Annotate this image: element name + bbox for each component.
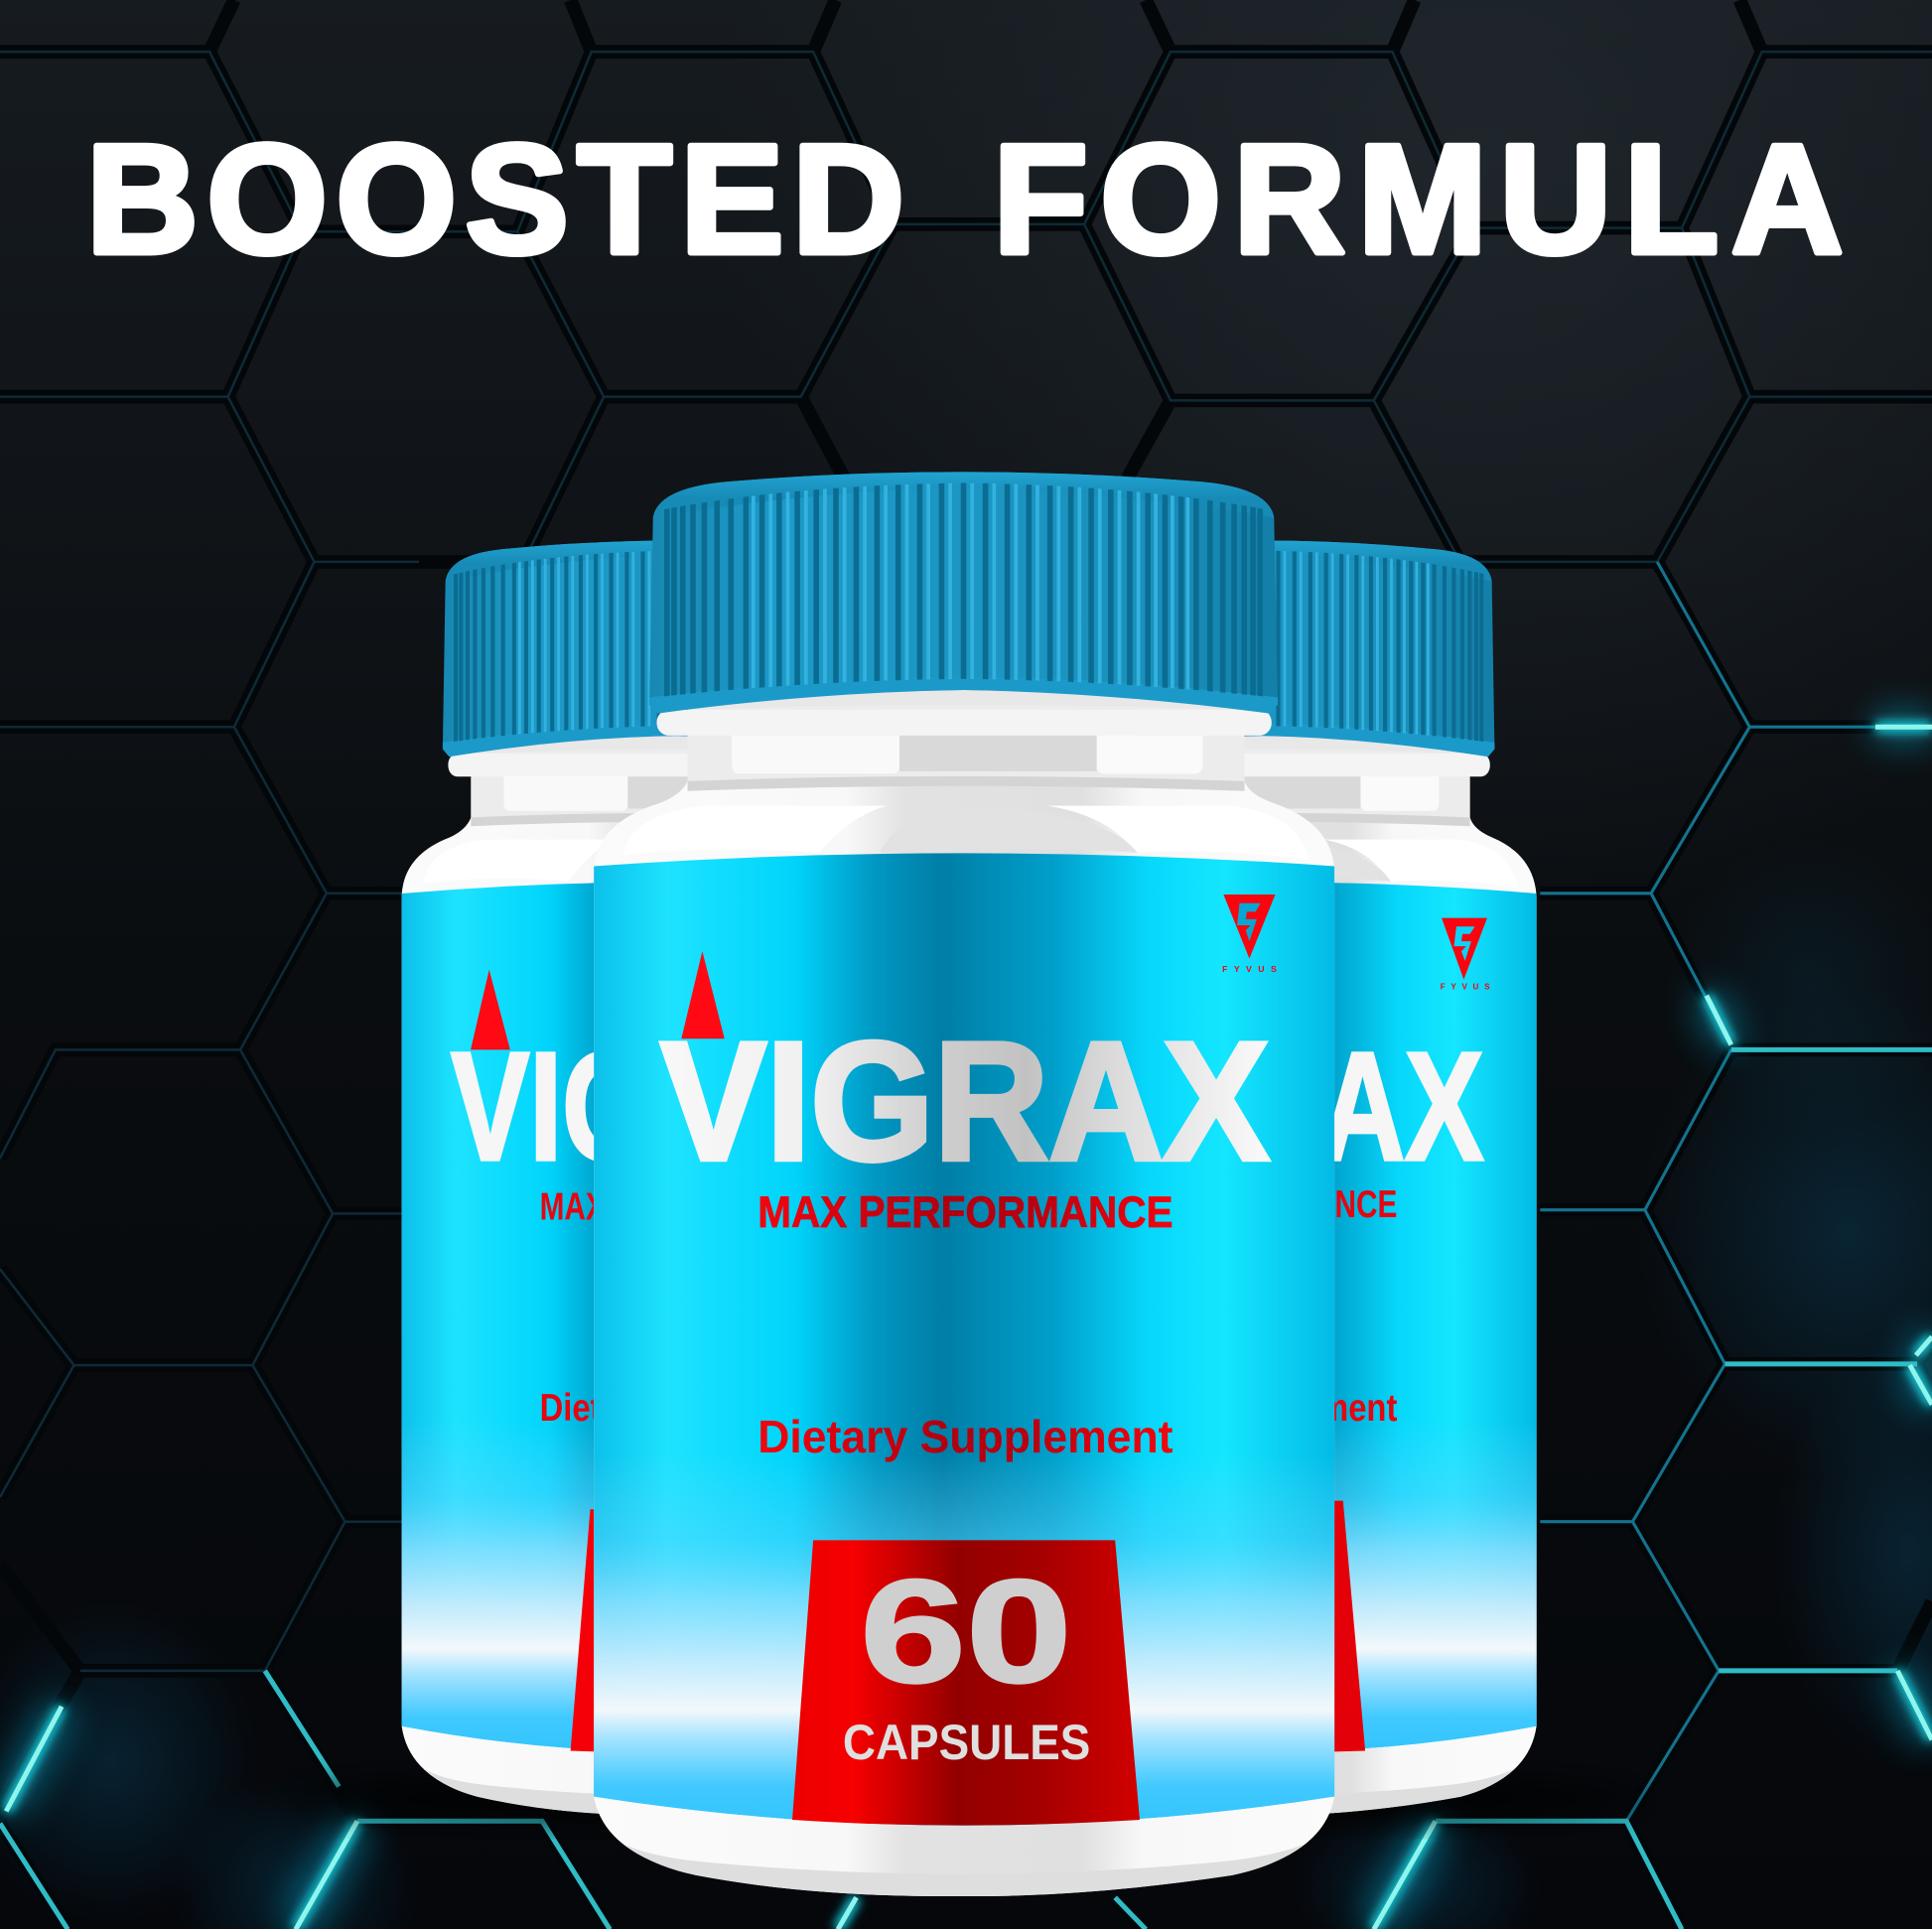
hexagon grid: teal lines on right side (1540, 562, 1932, 1821)
front bottle (594, 472, 1334, 1896)
title (86, 112, 1844, 286)
front bottle FYVUS logo: FYVUS (1222, 964, 1277, 974)
glowing hexagon edges: bright teal (0, 1049, 1932, 1929)
capsules label: CAPSULES (843, 1715, 1090, 1770)
left bottle red badge (571, 1509, 690, 1754)
front bottle dietary line: Dietary Supplement (758, 1411, 1173, 1462)
right bottle logo: FYVUS (1441, 983, 1490, 992)
front bottle subtitle: MAX PERFORMANCE (758, 1188, 1173, 1237)
left bottle red pennant (471, 970, 510, 1049)
glowing hexagon edges: tight blur (6, 727, 1932, 1929)
left back bottle (402, 541, 950, 1816)
front bottle red pennant (681, 951, 725, 1038)
right bottle brand name: VIGRAX (1033, 1021, 1483, 1192)
shadow below bottles (271, 1777, 1651, 1821)
right bottle dietary line: Dietary Supplement (1092, 1387, 1398, 1430)
left bottle brand name: VIGRAX (451, 1021, 901, 1192)
front bottle FYVUS logo (1222, 895, 1277, 974)
glowing hexagon edges: white-hot core (6, 727, 1932, 1929)
right bottle logo (1441, 918, 1490, 992)
right bottle subtitle: MAX PERFORMANCE (1092, 1183, 1397, 1226)
left bottle subtitle: MAX PERFORMANCE (540, 1186, 845, 1229)
capsule count: 60 (860, 1550, 1072, 1714)
left bottle dietary line: Dietary Supplement (540, 1387, 846, 1430)
right back bottle (989, 541, 1537, 1816)
right bottle red badge (1232, 1501, 1365, 1754)
title: FORMULA (993, 112, 1844, 286)
front bottle brand name: VIGRAX (660, 1008, 1269, 1196)
title: BOOSTED (86, 112, 904, 286)
front bottle red capsule badge (792, 1540, 1140, 1826)
glowing hexagon edges: wide halo (6, 727, 1932, 1929)
